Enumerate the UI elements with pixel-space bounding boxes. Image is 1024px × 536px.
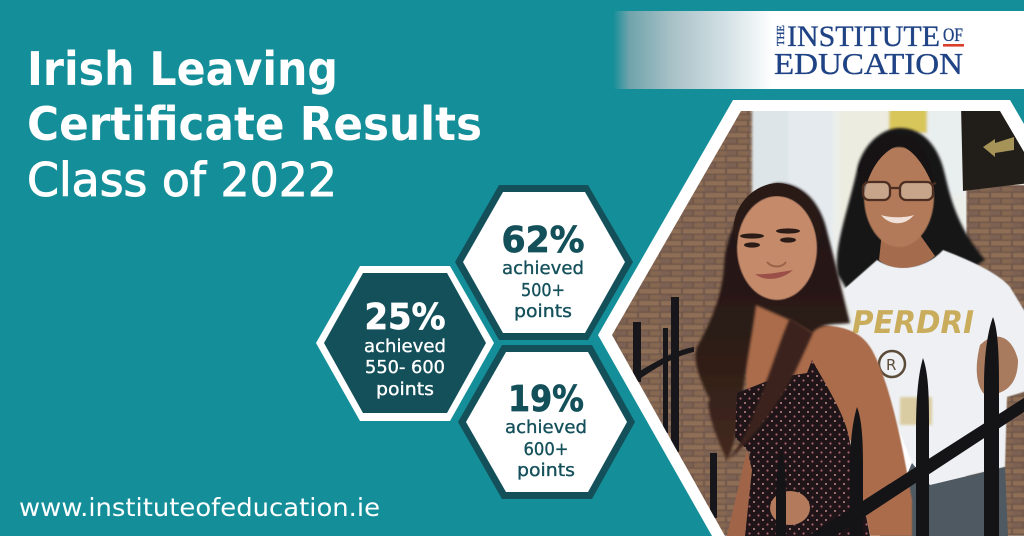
shirt print: PERDRI [852, 305, 974, 341]
brick wall [600, 100, 1024, 536]
brows and eyes [740, 228, 800, 248]
hexagon: 62% achieved 500+ points [455, 185, 633, 340]
logo: The Institute of Education: EDUCATION [774, 46, 963, 81]
hand [770, 491, 810, 525]
black sign with arrow [961, 105, 1024, 191]
nose shade [767, 262, 786, 266]
hexagon: 25% achieved 550-600 points [316, 266, 494, 421]
website url: www.instituteofeducation.ie [19, 493, 380, 522]
hair over chest [727, 318, 813, 460]
dress [735, 360, 870, 536]
hexagon: 62% achieved 500+ points: achieved [502, 259, 584, 279]
hexagon: 25% achieved 550-600 points: 25% [364, 297, 446, 338]
left arm [727, 450, 752, 536]
hexagon: 62% achieved 500+ points: 62% [502, 220, 584, 261]
hexagon: 19% achieved 600+ points: achieved [505, 418, 587, 438]
hair [837, 128, 985, 295]
hexagon: 25% achieved 550-600 points: points [376, 380, 434, 400]
face [737, 196, 817, 300]
logo band [613, 11, 1024, 89]
title: Irish Leaving [27, 42, 338, 96]
logo: The Institute of Education: OF [943, 25, 963, 46]
jeans [880, 463, 1008, 536]
neck [879, 232, 935, 268]
woman right: R [886, 356, 896, 374]
hexagon: 62% achieved 500+ points: 500+ [521, 281, 565, 301]
logo: The Institute of Education: INSTITUTE [787, 20, 940, 53]
woman left [695, 183, 912, 536]
photo: two students on steps [600, 100, 1024, 536]
hexagon: 19% achieved 600+ points: 19% [508, 379, 584, 420]
hair [695, 183, 850, 460]
logo: The Institute of Education [774, 20, 964, 81]
woman right [837, 128, 1024, 536]
railings behind [633, 297, 717, 518]
face [864, 147, 934, 247]
skin: neck, chest, shoulder, right arm [745, 290, 912, 536]
logo: The Institute of Education: THE [776, 25, 787, 46]
hexagon: 25% achieved 550-600 points: 550- 600 [365, 358, 445, 378]
front railing [776, 317, 1024, 536]
hair parting [858, 146, 934, 194]
smile [755, 270, 793, 279]
t-shirt [843, 250, 1024, 485]
smile [881, 215, 914, 223]
forehead hair [733, 183, 821, 245]
hexagon: 19% achieved 600+ points: points [517, 461, 575, 481]
title [27, 42, 482, 207]
glasses [863, 182, 936, 200]
title: Class of 2022 [27, 153, 337, 207]
hexagon: 19% achieved 600+ points [458, 345, 635, 499]
hand [977, 337, 1018, 395]
hexagon: 19% achieved 600+ points: 600+ [524, 440, 568, 460]
doorway and columns [752, 105, 966, 340]
hexagon: 62% achieved 500+ points: points [514, 302, 572, 322]
hexagon: 25% achieved 550-600 points: achieved [364, 337, 446, 357]
title: Certificate Results [27, 97, 482, 151]
photo frame [598, 100, 1024, 536]
